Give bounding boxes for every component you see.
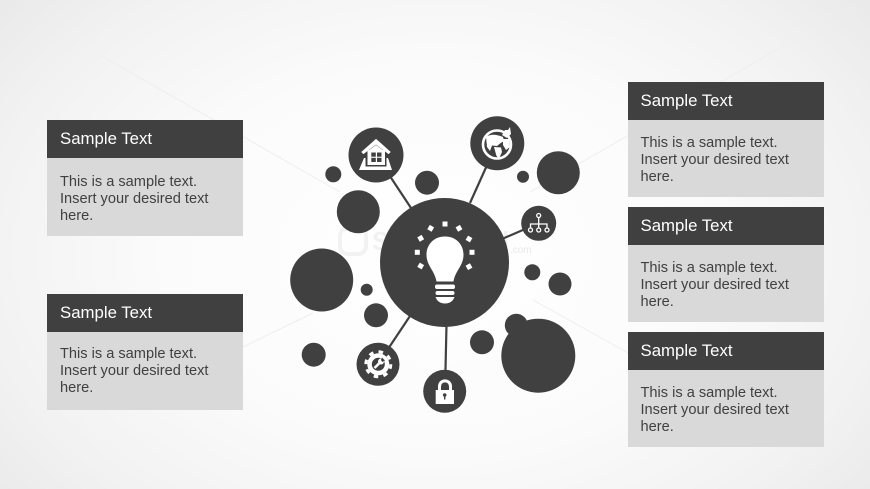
text block: Insert your desired text [60,191,208,207]
connector lines [376,143,539,391]
heading: Sample Text [60,129,152,148]
text block: Insert your desired text [640,277,789,293]
heading: Sample Text [640,341,733,360]
text block: This is a sample text. [60,174,197,190]
watermark: SlideModel [372,226,509,256]
text block: Insert your desired text [640,152,789,168]
text block [60,174,208,224]
heading [628,207,824,245]
heading [47,120,243,158]
heading [628,332,824,370]
panel: left top [47,120,243,236]
text block: This is a sample text. [60,346,197,362]
text block: here. [640,294,674,310]
icon: house [348,128,404,182]
text block [640,260,789,310]
panel: right middle [628,207,824,322]
text block [640,134,789,185]
bubbles [290,151,580,393]
panel: right top [628,82,824,197]
central hub with light bulb [380,198,509,327]
text block: here. [60,380,93,396]
text block: here. [60,208,93,224]
icon: globe [470,116,524,170]
text block: Insert your desired text [60,363,208,379]
network diagram [290,116,580,413]
text block [640,384,789,435]
text block: here. [640,419,674,435]
heading: Sample Text [640,91,733,110]
text block: This is a sample text. [640,384,778,400]
watermark: .com [510,245,532,256]
icon: org chart [521,206,556,241]
heading: Sample Text [640,216,733,235]
heading: Sample Text [60,302,152,322]
heading [628,82,824,120]
icon: padlock [423,370,466,413]
icon: gear and wrench [356,343,400,386]
text block: here. [640,169,674,185]
text block: This is a sample text. [640,134,778,150]
text block: This is a sample text. [640,260,778,276]
heading [47,294,243,332]
panel: right bottom [628,332,824,447]
panel: left bottom [47,294,243,410]
text block: Insert your desired text [640,402,789,418]
text block [60,346,208,396]
